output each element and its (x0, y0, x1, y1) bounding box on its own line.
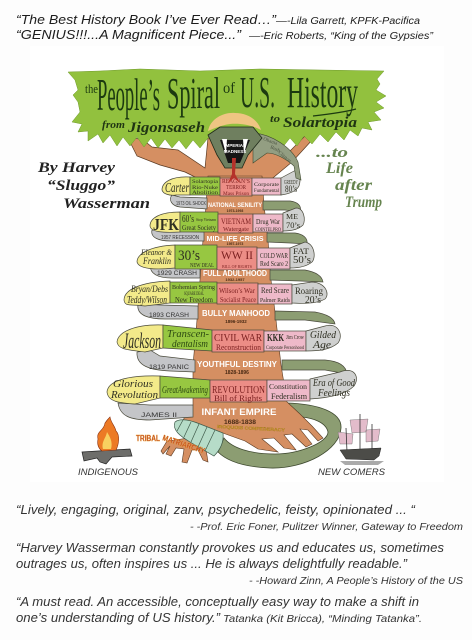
spiral band row: Bryan and Wilson: SQUARE DEAL (184, 292, 204, 297)
quote: Zinn: “Harvey Wasserman constantly provokes us and educates us, sometimes (16, 541, 444, 555)
back bands left (crashes): 1957 RECESSION (161, 235, 199, 241)
new comers label: NEW COMERS (318, 467, 386, 478)
spiral band row: Roosevelt: COLD WAR (260, 252, 288, 260)
spiral band row: Bryan and Wilson: Bohemian Spring (172, 285, 215, 291)
quote: Foner (16, 503, 463, 533)
spiral band row: Revolution: Glorious (113, 379, 153, 390)
spiral band row: Roosevelt: WW II (221, 248, 253, 262)
spiral band row: Carter: Mass Prison (223, 192, 250, 197)
spiral band row: Roosevelt: 30’s (178, 248, 200, 264)
spiral band row: Bryan and Wilson: Socialist Peace (220, 296, 256, 304)
back bands left (crashes): 1893 CRASH (149, 312, 189, 319)
back bands left (crashes): JAMES II (141, 412, 177, 419)
trunk life stage labels: 1957-1973 (227, 242, 243, 246)
spiral band row: Roosevelt: NEW DEAL (190, 263, 214, 269)
title: the (85, 81, 98, 96)
spiral band row: Carter: TERROR (226, 185, 246, 191)
spiral band row: Bryan and Wilson: Wilson’s War (219, 287, 256, 295)
spiral band row: JFK: JFK (153, 215, 180, 234)
spiral band row: JFK: Drug War (256, 218, 281, 226)
tribal matriarchy label: TRIBAL (136, 434, 160, 443)
spiral band row: Jackson: Gilded (310, 329, 336, 341)
to life after Trump: after (335, 177, 373, 194)
tribal matriarchy label: MATRIARCHY (161, 433, 207, 456)
spiral band row: Roosevelt: Franklin (142, 256, 171, 266)
trunk (183, 176, 323, 452)
quote: Tatanka (16, 595, 422, 625)
spiral band row: Roosevelt: 50’s (293, 255, 311, 266)
to life after Trump: Life (325, 160, 353, 177)
spiral band row: Revolution: Bill of Rights (214, 394, 262, 403)
trunk life stage labels: NATIONAL SENILITY (208, 203, 262, 209)
indigenous label: INDIGENOUS (78, 467, 139, 478)
trunk life stage labels: 1973-1993 (227, 209, 243, 213)
quote: Tatanka: one’s understanding of US history.” (16, 611, 221, 625)
tribal matriarchy label (136, 433, 207, 456)
spiral band row: Jackson: Age (312, 339, 331, 351)
trunk life stage labels: YOUTHFUL DESTINY (197, 360, 278, 369)
spiral band row: Bryan and Wilson (124, 281, 327, 306)
serpent tail rings (174, 420, 223, 456)
top review quotes: “The Best History Book I’ve Ever Read…” (16, 12, 277, 27)
to life after Trump (316, 145, 382, 211)
serpent neck with names: Bush (269, 145, 281, 154)
spiral band row: Jackson: Reconstruction (216, 343, 261, 352)
hair (208, 113, 261, 131)
trunk life stage labels: BULLY MANHOOD (202, 309, 270, 318)
back bands right (olive) (263, 201, 347, 374)
left foot roots (161, 436, 208, 463)
spiral band row: Carter: Solartopia (192, 180, 219, 185)
spiral band row: Revolution: REVOLUTION (212, 384, 265, 396)
quote: Foner: “Lively, engaging, original, zanv, psychedelic, feisty, opinionated ... “ (16, 503, 416, 517)
spiral band row: Roosevelt (137, 242, 314, 270)
canopy with title (68, 68, 386, 149)
spiral band row: Jackson: CIVIL WAR (214, 332, 263, 344)
serpent neck with names (253, 133, 301, 180)
spiral band row: Bryan and Wilson: Red Scare (261, 286, 289, 295)
spiral band row: JFK: Stop Vietnam (196, 217, 216, 222)
spiral band row: Carter (162, 170, 300, 197)
quote: Zinn: outrages us, often inspires us ... He is always delightfully readable.” (16, 557, 408, 571)
spiral band row: Revolution (107, 370, 356, 404)
spiral band row: Jackson: Jim Crow (286, 335, 305, 341)
spiral band row: Jackson (117, 325, 340, 353)
title: of (223, 80, 236, 97)
spiral band row: JFK: VIETNAM (221, 217, 251, 226)
spiral band row: Jackson: Jackson (123, 328, 161, 353)
serpent body around foot (218, 403, 341, 468)
quote: Zinn: - -Howard Zinn, A People’s History of the US (249, 575, 463, 587)
bottom review quotes (16, 503, 463, 625)
trunk life stage labels: 1896-1932 (225, 319, 247, 324)
imperial madness text (224, 143, 246, 154)
spiral band row: JFK: 60’s (182, 214, 194, 225)
imperial madness text: MADNESS (224, 149, 246, 154)
spiral band row: JFK: 70’s (286, 221, 300, 230)
author byline (37, 160, 150, 212)
spiral band row: Bryan and Wilson: Palmer Raids (260, 297, 290, 304)
spiral band row: Jackson: Transcen- (167, 329, 209, 340)
trunk life stage labels: 1828-1896 (225, 370, 249, 376)
spiral band row: Roosevelt: BILL OF RIGHTS (222, 264, 252, 269)
spiral band row: JFK (150, 208, 304, 234)
top review quotes: —-Eric Roberts, “King of the Gypsies” (248, 31, 434, 42)
spiral band row: Carter: REAGAN’S (222, 179, 250, 185)
trunk life stage labels: FULL ADULTHOOD (203, 269, 267, 278)
spiral band row: Carter: GREEDY (284, 180, 298, 186)
economic label on foot: IROQUOIS CONFEDERACY (217, 424, 285, 433)
spiral band row: Roosevelt: Red Scare 2 (260, 260, 288, 268)
serpent neck with names: Obama (262, 137, 278, 147)
back bands left (crashes) (118, 195, 207, 420)
spiral band row: Revolution: Era of Good (312, 378, 356, 389)
spiral band row: Bryan and Wilson: 20’s (305, 295, 321, 306)
subtitle: to (270, 114, 280, 125)
quote: Tatanka: “A must read. An accessible, conceptually easy way to make a shift in (16, 595, 419, 609)
serpent neck with names: Clinton (277, 151, 292, 164)
subtitle: Jigonsaseh (127, 120, 205, 136)
quote: Tatanka: Tatanka (Kit Bricca), “Minding Tatanka”. (223, 613, 422, 625)
back bands left (crashes): 1819 PANIC (149, 364, 189, 371)
spiral band row: Jackson: dentalism (172, 339, 208, 350)
spiral band row: Revolution: Constitution (269, 382, 307, 391)
subtitle: Solartopia (283, 115, 358, 131)
trunk life stage labels: 1688-1838 (224, 420, 257, 426)
imperial madness text: IMPERIAL (224, 143, 246, 148)
trunk life stage labels: MID-LIFE CRISIS (206, 234, 264, 243)
spiral band row: Carter: Rio-Nuke (192, 186, 219, 191)
spiral band row: Carter: 80’s (285, 184, 297, 194)
spiral band row: JFK: Great Society (182, 224, 216, 232)
subtitle: from (102, 119, 125, 131)
spiral band row: Carter: Fundamental (254, 189, 280, 194)
title: Spiral (167, 69, 220, 118)
spiral band row: Carter: Carter (165, 181, 189, 196)
author byline: “Sluggo” (47, 178, 116, 194)
spiral band row: Carter: Corporate (254, 183, 280, 188)
spiral band row: Revolution: Federalism (271, 391, 307, 401)
title: History (287, 68, 358, 117)
title (85, 68, 358, 120)
icon: campfire (82, 417, 132, 464)
top review quotes (16, 12, 434, 42)
spiral band row: Bryan and Wilson: Roaring (295, 286, 323, 296)
top review quotes: —-Lila Garrett, KPFK-Pacifica (275, 16, 420, 27)
spiral band row: Bryan and Wilson: New Freedom (175, 296, 214, 304)
quote: Zinn (16, 541, 463, 587)
trunk life stage labels (197, 203, 278, 426)
back bands left (crashes): 1929 CRASH (157, 270, 197, 277)
spiral band row: Revolution: Revolution (110, 389, 158, 401)
title: People’s (97, 70, 160, 120)
spiral band row: JFK: ME (286, 213, 298, 221)
tree branches (128, 136, 313, 182)
trunk life stage labels: 1932-1957 (225, 277, 245, 282)
spiral band row: Bryan and Wilson: Bryan/Debs (131, 284, 168, 294)
trunk life stage labels: INFANT EMPIRE (202, 407, 276, 417)
quote: Foner: - -Prof. Eric Foner, Pulitzer Winner, Gateway to Freedom (190, 521, 463, 533)
spiral band row: Bryan and Wilson: Teddy/Wilson (127, 295, 167, 306)
icon: sailing ship (338, 414, 384, 465)
spiral band row: Revolution: GreatAwakening (162, 385, 208, 396)
spiral band row: JFK: Watergate (223, 226, 249, 233)
to life after Trump: ...to (316, 145, 348, 161)
spiral band row: Jackson: Corporate Personhood (266, 345, 304, 351)
top review quotes: “GENIUS!!!...A Magnificent Piece...” (16, 27, 242, 42)
back bands left (crashes): 1973 OIL SHOCK (176, 201, 206, 207)
serpent head with hair (208, 113, 262, 183)
spiral band row: JFK: COINTELPRO (255, 228, 281, 233)
subtitle (102, 114, 358, 136)
spiral band row: Carter: Abolition (192, 191, 219, 196)
serpent tongue (228, 158, 240, 183)
to life after Trump: Trump (345, 194, 382, 211)
author byline: By Harvey (37, 160, 115, 176)
title: U.S. (240, 68, 275, 117)
spiral band row: Jackson: KKK (267, 333, 284, 344)
spiral band row: Roosevelt: Eleanor & (140, 248, 173, 257)
spiral band row: Roosevelt: FAT (293, 247, 309, 256)
author byline: Wasserman (63, 196, 150, 212)
spiral band row: Revolution: Feelings (317, 388, 350, 399)
